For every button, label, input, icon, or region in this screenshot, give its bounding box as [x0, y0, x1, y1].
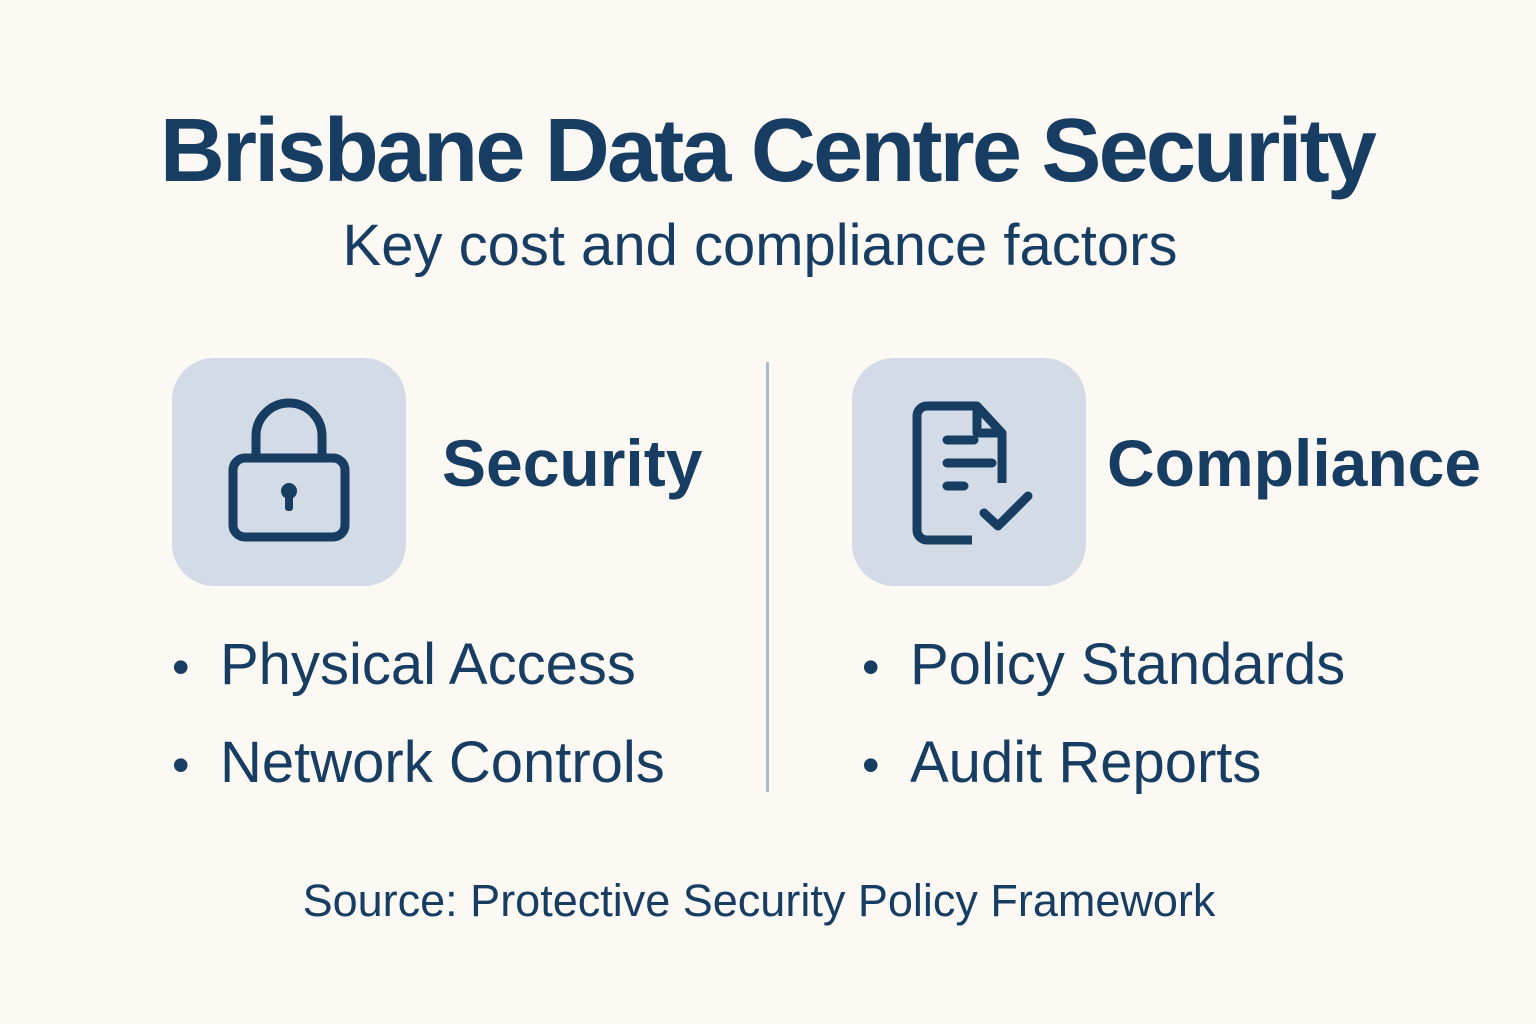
list: security items	[172, 632, 665, 795]
divider	[766, 362, 769, 792]
list: compliance items: Policy Standards	[910, 632, 1345, 697]
list: compliance items: •	[862, 737, 880, 793]
icon: document check	[852, 358, 1086, 586]
list: compliance items: •	[862, 639, 880, 695]
list: security items: Physical Access	[220, 632, 636, 697]
list: security items: •	[172, 737, 190, 793]
panel: security	[172, 358, 702, 795]
list: security items: Network Controls	[220, 730, 665, 795]
list: compliance items: Audit Reports	[910, 730, 1261, 795]
icon: lock	[172, 358, 406, 586]
panel: compliance	[852, 358, 1481, 795]
list: compliance items	[862, 632, 1345, 795]
heading: security: Security	[442, 426, 702, 500]
subtitle: Key cost and compliance factors	[343, 213, 1177, 278]
source: Source: Protective Security Policy Framework	[303, 875, 1215, 926]
heading: compliance: Compliance	[1107, 426, 1481, 500]
title: Brisbane Data Centre Security	[160, 101, 1374, 201]
list: security items: •	[172, 639, 190, 695]
